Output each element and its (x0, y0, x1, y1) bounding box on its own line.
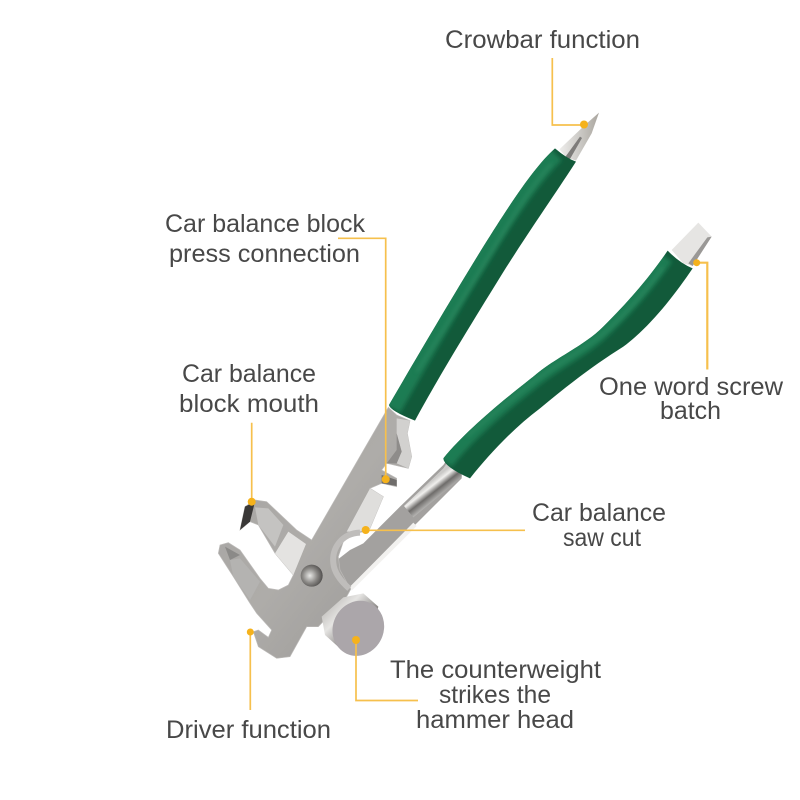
label: The counterweight (390, 656, 601, 684)
dot (352, 636, 360, 644)
callout: crowbar function (445, 26, 640, 128)
crowbar steel tip (559, 113, 599, 161)
label: Car balance (532, 499, 666, 527)
pivot pin (301, 565, 323, 587)
lower green handle (443, 251, 693, 478)
screwdriver steel tip (672, 223, 712, 266)
upper green handle (389, 148, 576, 421)
dot (580, 120, 588, 128)
callout: counterweight strikes the hammer head: hammer head (416, 706, 574, 734)
label: Driver function (166, 716, 331, 744)
label: Car balance (182, 360, 316, 388)
callout: driver function (166, 628, 331, 744)
dot (362, 526, 370, 534)
dot (382, 475, 390, 483)
callout: one word screw batch: batch (660, 397, 721, 425)
label: Crowbar function (445, 26, 640, 54)
callout: car balance block mouth (179, 360, 319, 506)
dot (693, 259, 700, 266)
dot (248, 498, 256, 506)
leader line (552, 58, 584, 125)
callout: car balance block press connection: press connection (169, 240, 360, 268)
label: One word screw (599, 373, 784, 401)
dot (247, 628, 254, 636)
leader line (251, 423, 253, 501)
label: Car balance block (165, 210, 365, 238)
leader line (697, 263, 707, 370)
callout: counterweight strikes the hammer head (352, 636, 601, 734)
callout: one word screw batch (599, 259, 784, 425)
callout: car balance block press connection (165, 210, 390, 483)
lower arm steel (335, 438, 462, 591)
callout: car balance block mouth: block mouth (179, 390, 319, 418)
leader line (249, 632, 251, 710)
tool: hand wrench pliers (218, 113, 712, 664)
callout: car balance saw cut (362, 499, 666, 552)
hammer head (322, 592, 393, 664)
callout: car balance saw cut: saw cut (563, 524, 641, 552)
callout: counterweight strikes the hammer head: strikes the (439, 681, 551, 709)
leader line (366, 529, 525, 531)
leader line (356, 640, 418, 700)
jaw and fork body (218, 407, 412, 658)
leader line (338, 238, 386, 479)
